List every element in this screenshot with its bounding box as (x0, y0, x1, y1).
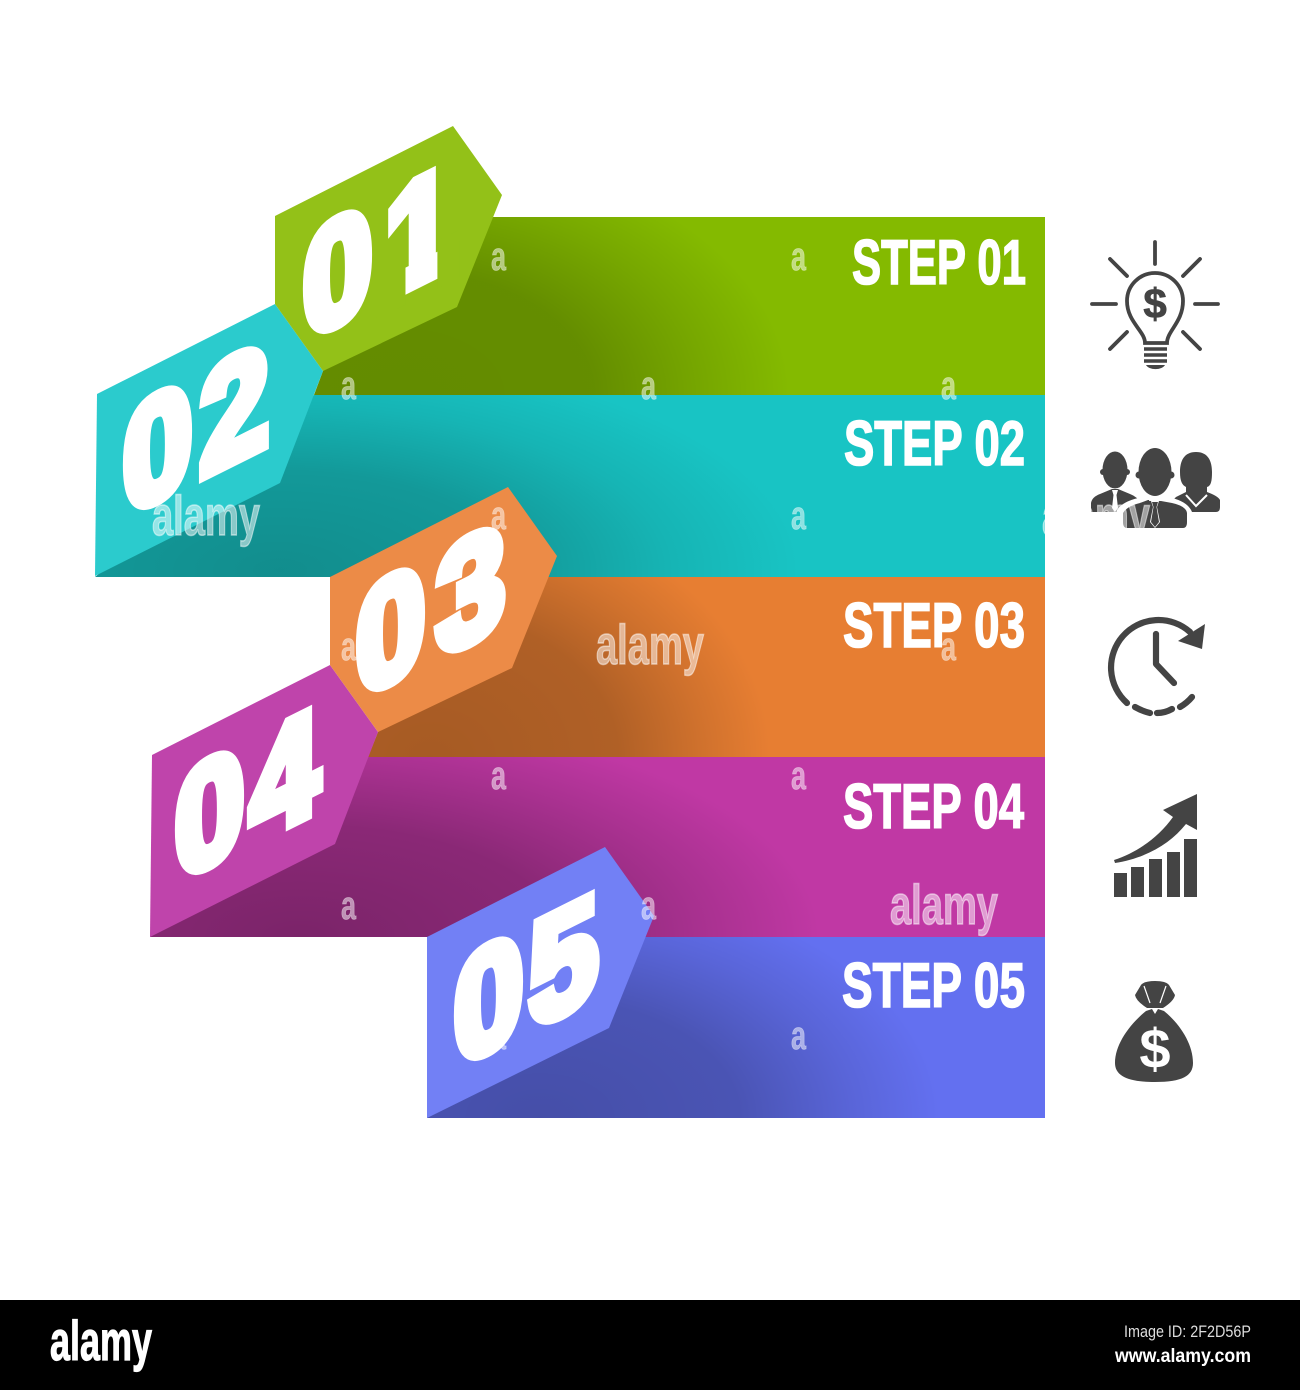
watermarks: alamy (152, 484, 260, 547)
watermarks: a (491, 235, 507, 279)
badge: 03 (330, 487, 557, 732)
panel: step 02 band (95, 395, 1045, 577)
watermarks: a (941, 625, 957, 669)
footer bar: Image ID: 2F2D56P (1124, 1322, 1251, 1341)
badge: 05 (427, 847, 654, 1118)
watermarks: a (791, 494, 807, 538)
watermarks: alamy (596, 613, 704, 676)
watermarks: a (341, 625, 357, 669)
icon: money bag: $ (1139, 1017, 1171, 1080)
watermarks: a (341, 364, 357, 408)
badge: 05: 05 (454, 862, 598, 1099)
icon: business team (1091, 448, 1220, 532)
panel: step 04 band (150, 757, 1045, 937)
badge: 04 (150, 665, 378, 937)
badge: 01: 01 (303, 132, 454, 372)
watermarks: a (341, 884, 357, 928)
watermarks: a (791, 235, 807, 279)
watermarks: a (641, 884, 657, 928)
icon: light bulb with dollar (1092, 242, 1218, 369)
badge: 01 (275, 126, 502, 372)
panel: step 01 band: STEP 01 (852, 228, 1026, 298)
panel: step 03 band (368, 577, 1045, 757)
panel: step 03 band: STEP 03 (843, 591, 1025, 661)
watermarks: a (491, 1014, 507, 1058)
watermarks: a (641, 364, 657, 408)
watermarks: a (491, 754, 507, 798)
badge: 04: 04 (175, 676, 319, 913)
watermarks (152, 235, 1150, 1058)
badge: 02 (95, 304, 323, 576)
panel: step 02 band: STEP 02 (844, 409, 1025, 479)
icon: light bulb with dollar: $ (1143, 280, 1167, 327)
watermarks: a (791, 1014, 807, 1058)
panel: step 05 band (427, 937, 1045, 1118)
panel: step 05 band: STEP 05 (842, 951, 1025, 1021)
badge: 03: 03 (356, 490, 505, 730)
icon: clock with arrow (1111, 620, 1205, 713)
watermarks: a (491, 494, 507, 538)
watermarks: alamy (1042, 484, 1150, 547)
icon: money bag (1115, 981, 1193, 1082)
watermarks: a (941, 364, 957, 408)
watermarks: alamy (890, 873, 998, 936)
panel: step 04 band: STEP 04 (843, 772, 1024, 842)
footer bar: alamy (50, 1309, 152, 1372)
panel: step 01 band (314, 217, 1045, 395)
icon: growth chart (1114, 794, 1197, 897)
watermarks: a (791, 754, 807, 798)
footer bar: www.alamy.com (1114, 1346, 1251, 1367)
footer bar (0, 1300, 1300, 1390)
badge: 02: 02 (123, 310, 269, 548)
